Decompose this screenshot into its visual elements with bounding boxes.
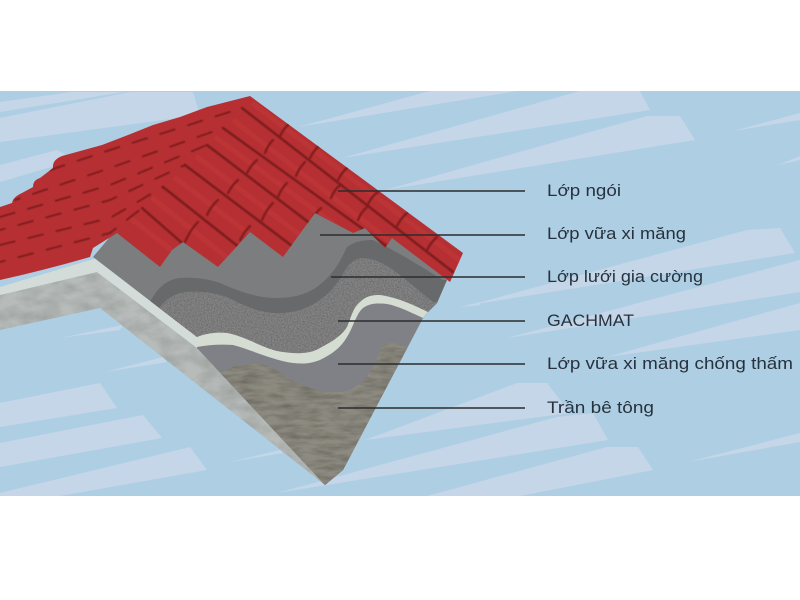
left slope tile row shadows: [0, 108, 242, 262]
leader lines: [320, 191, 525, 408]
tile cross steps: [185, 123, 437, 250]
red tiled roof: [0, 90, 470, 290]
concrete ceiling layer: [220, 344, 408, 485]
roof cross-section: [0, 96, 463, 485]
concrete side face: [0, 272, 343, 485]
top cement layer: [93, 213, 447, 339]
gachmat speckled layer: [160, 258, 438, 354]
white band: [197, 295, 428, 485]
background panel: [0, 91, 800, 496]
label: cement mortar: Lớp vữa xi măng: [547, 225, 686, 243]
background light streaks: [0, 91, 800, 496]
tile ridge highlights: [170, 214, 461, 262]
white top strip of concrete edge: [0, 258, 197, 348]
reinforcing mesh layer: [150, 240, 447, 479]
label: gachmat: GACHMAT: [547, 312, 634, 330]
tile base: [0, 90, 470, 290]
right slope tile row shadows: [142, 108, 453, 272]
label: waterproof cement: Lớp vữa xi măng chống thấm: [547, 355, 793, 373]
label: concrete ceiling: Trần bê tông: [547, 399, 654, 417]
label: reinforcing mesh: Lớp lưới gia cường: [547, 268, 703, 286]
waterproof cement layer: [197, 304, 423, 485]
label: roof tiles: Lớp ngói: [547, 182, 621, 200]
layered top face: [93, 213, 447, 485]
labels: [547, 182, 793, 417]
